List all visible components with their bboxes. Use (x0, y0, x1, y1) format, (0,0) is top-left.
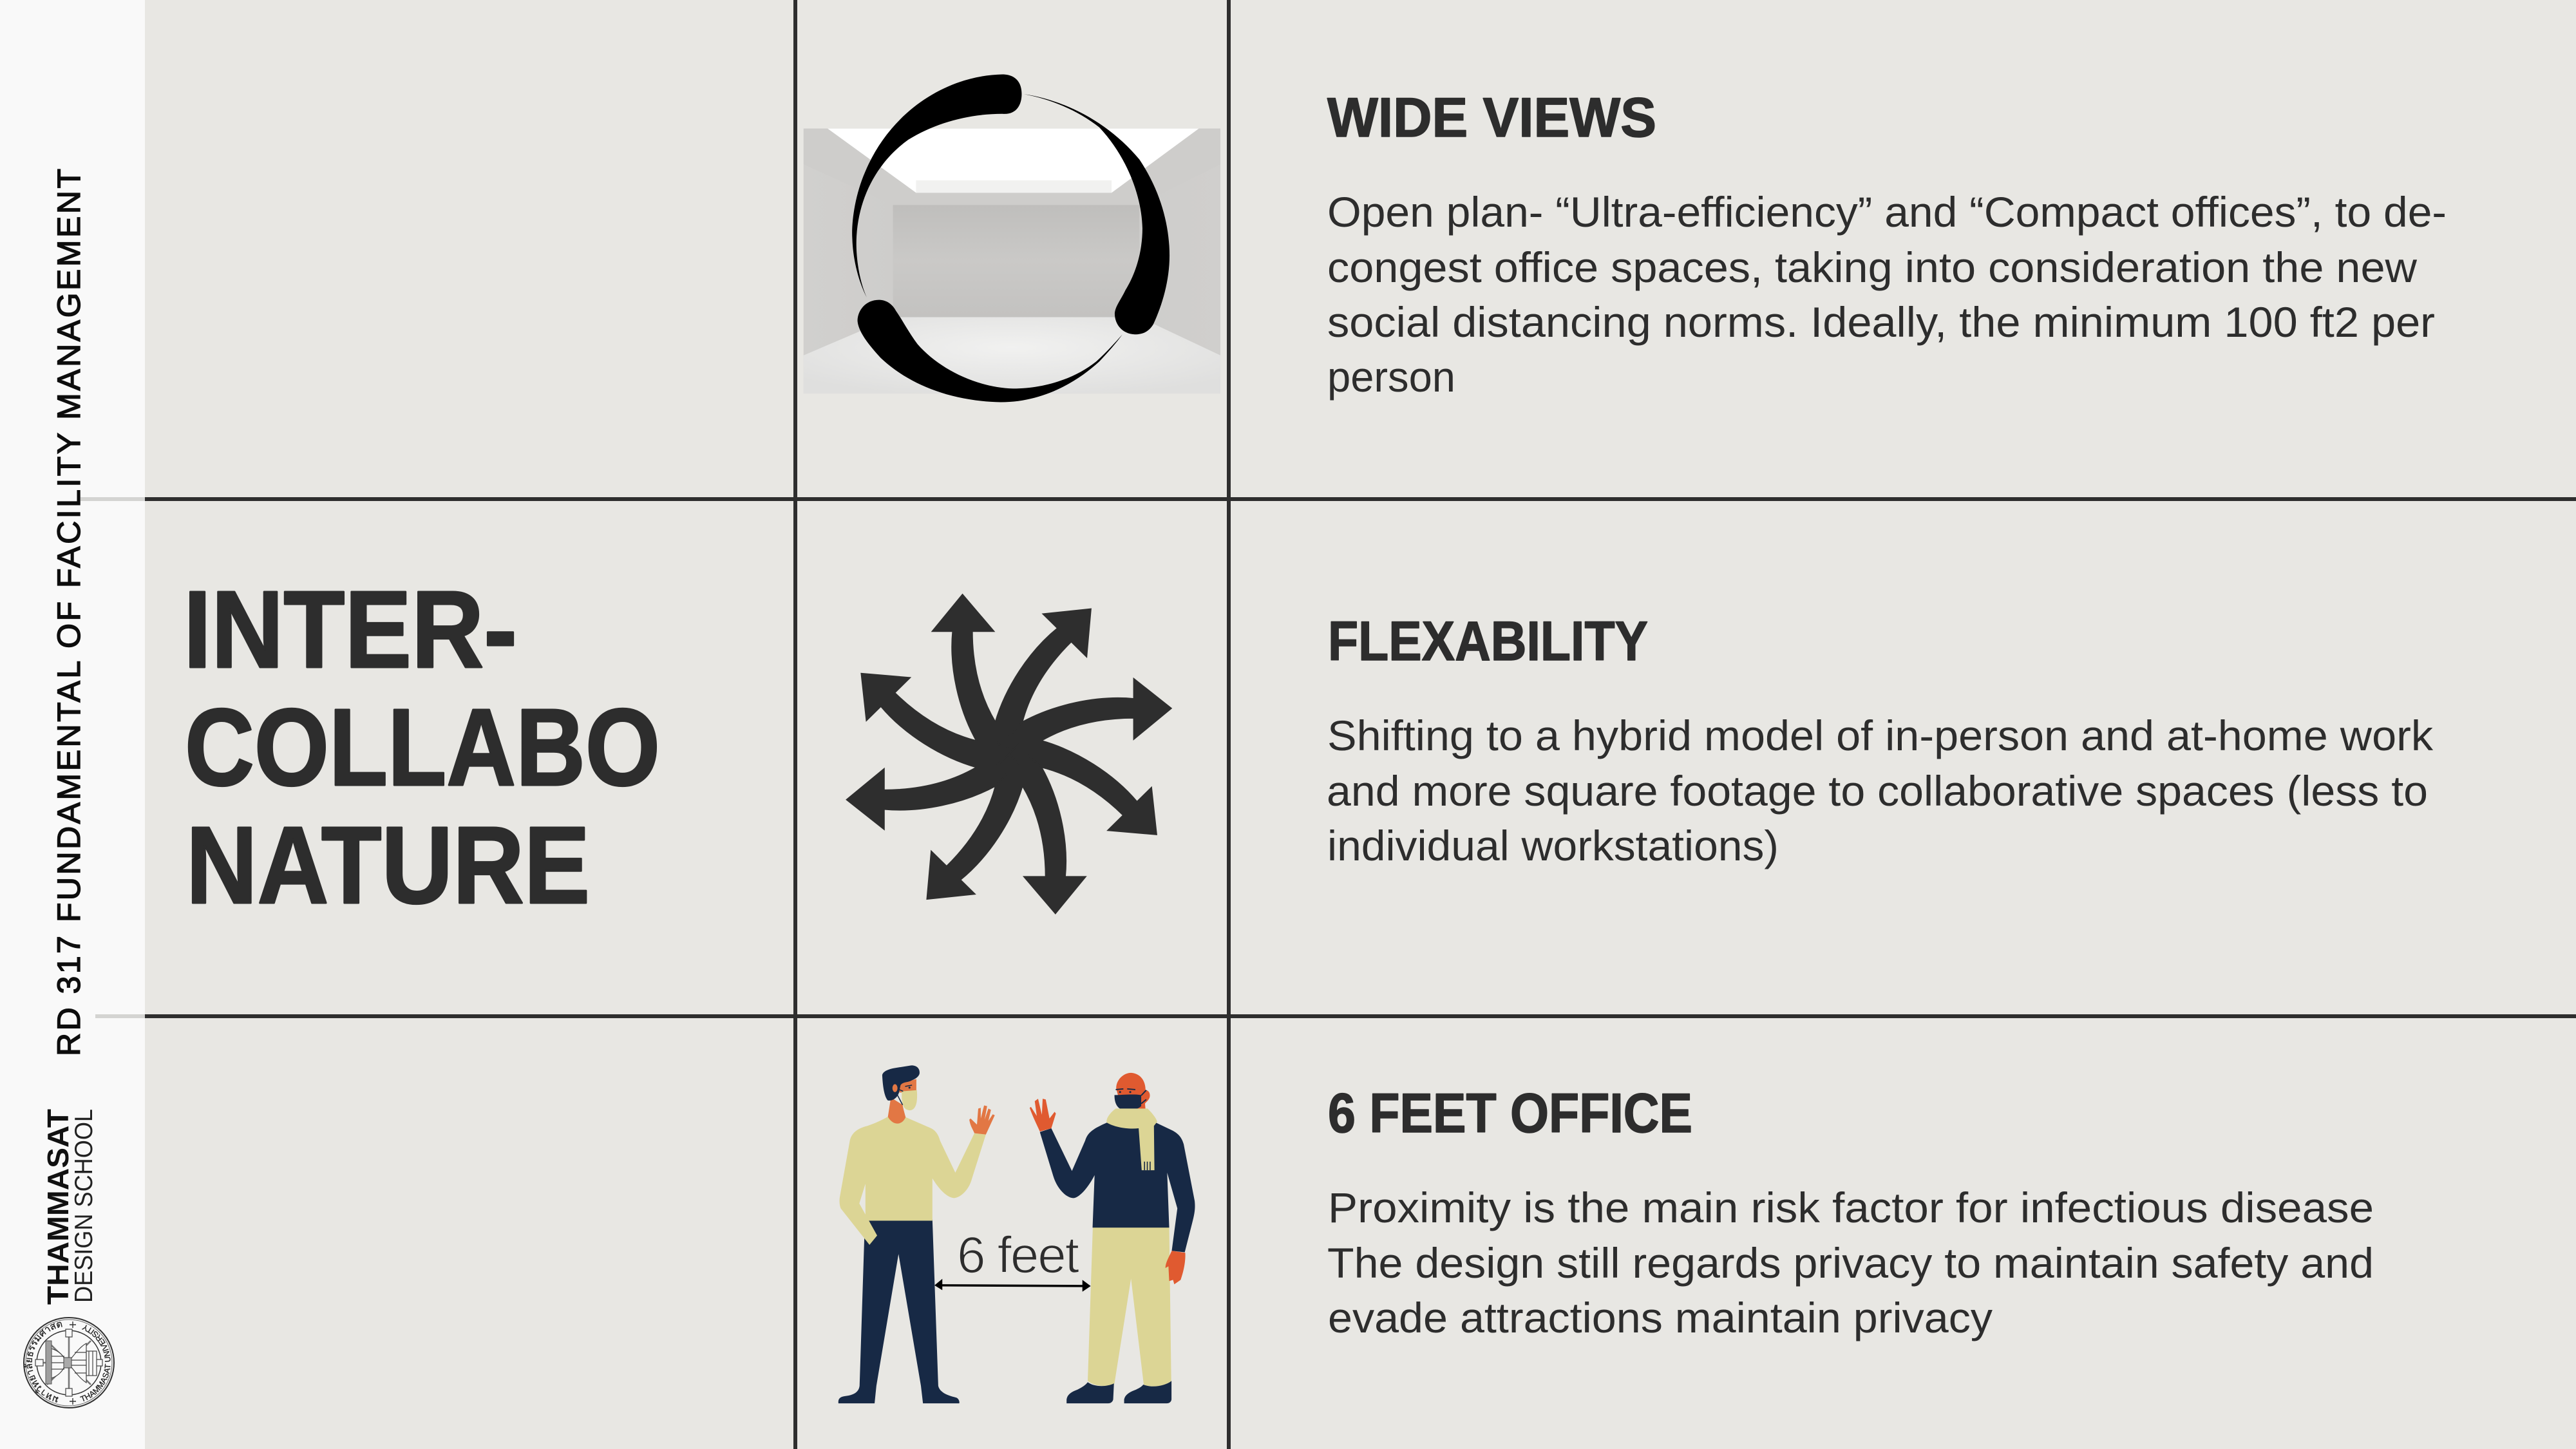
sidebar (0, 0, 145, 1449)
heading: flexability: FLEXABILITY (1328, 611, 1648, 672)
room photo (804, 129, 1220, 393)
main title (184, 569, 660, 927)
text: flexability description: Shifting to a hybrid model of in-person and at-home work (1327, 712, 2434, 759)
ink ring (852, 74, 1170, 402)
text: flexability description: individual workstations) (1327, 822, 1779, 869)
main title: INTER- (184, 569, 517, 691)
icon: swirl of eight arrows (840, 589, 1177, 920)
text: 6 feet office description: evade attractions maintain privacy (1328, 1294, 1993, 1341)
text: wide views description: Open plan- “Ultra-efficiency” and “Compact offices”, to de- (1327, 188, 2447, 236)
text: 6 feet office description (1327, 1184, 2374, 1341)
text: wide views description: congest office spaces, taking into consideration the new (1327, 243, 2417, 291)
heading: 6 feet office: 6 FEET OFFICE (1328, 1083, 1692, 1144)
school wordmark: DESIGN SCHOOL (70, 1109, 98, 1303)
text: 6 feet office description: Proximity is the main risk factor for infectious disease (1328, 1184, 2374, 1231)
section: 6 feet office (1327, 1083, 2374, 1341)
person right (1030, 1073, 1195, 1403)
section: wide views (1327, 87, 2447, 401)
image: empty white room with skylight and ink ring (804, 74, 1220, 402)
text: wide views description: person (1327, 353, 1455, 401)
text: wide views description: social distancing norms. Ideally, the minimum 100 ft2 per (1327, 298, 2435, 346)
section: flexability (1327, 611, 2434, 869)
text: 6 feet office description: The design still regards privacy to maintain safety and (1327, 1239, 2374, 1287)
text: flexability description (1327, 712, 2434, 869)
person left (838, 1065, 995, 1403)
label: 6 feet: 6 feet (957, 1226, 1079, 1283)
university seal: THAMMASAT UNIVERSITY (80, 1325, 111, 1401)
university seal (23, 1317, 115, 1408)
heading: wide views: WIDE VIEWS (1327, 87, 1656, 149)
text: flexability description: and more square footage to collaborative spaces (less to (1327, 767, 2428, 815)
text: wide views description (1327, 188, 2447, 401)
arrow: distance (935, 1280, 1090, 1291)
school wordmark (41, 1109, 98, 1305)
main title: COLLABO (185, 687, 660, 809)
school wordmark: THAMMASAT (41, 1109, 75, 1305)
course title vertical: RD 317 FUNDAMENTAL OF FACILITY MANAGEMENT (51, 169, 87, 1056)
illustration: two masked people six feet apart (838, 1065, 1195, 1403)
main title: NATURE (186, 804, 590, 927)
